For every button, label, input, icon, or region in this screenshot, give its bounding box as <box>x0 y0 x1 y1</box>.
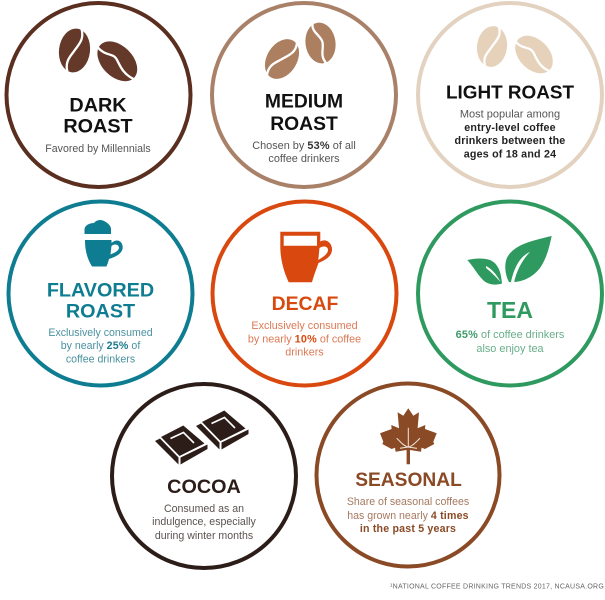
text: seasonal note: in the past 5 years <box>360 523 456 535</box>
text: cocoa note: Consumed as an <box>164 503 244 515</box>
heading: flavored roast: ROAST <box>66 300 135 322</box>
text: light roast note: ages of 18 and 24 <box>464 148 556 160</box>
icon: dark coffee beans <box>56 26 145 89</box>
text: light roast note: entry-level coffee <box>464 122 556 134</box>
text: light roast note: Most popular among <box>460 108 560 120</box>
panel: seasonal <box>316 384 500 566</box>
text: medium roast note: coffee drinkers <box>268 153 340 165</box>
text: decaf note: Exclusively consumed <box>251 320 358 332</box>
heading: cocoa: COCOA <box>167 476 241 498</box>
heading: seasonal: SEASONAL <box>355 470 462 491</box>
heading: dark roast: DARK <box>69 94 127 116</box>
panel: cocoa <box>112 384 296 568</box>
icon: latte cup <box>84 220 123 266</box>
text: seasonal note: Share of seasonal coffees <box>347 496 469 508</box>
panel: decaf <box>212 202 396 386</box>
text: flavored roast note: by nearly 25% of <box>61 340 140 352</box>
source footnote: ¹NATIONAL COFFEE DRINKING TRENDS 2017, NCAUSA.ORG <box>390 584 604 590</box>
panel: medium roast <box>212 3 396 187</box>
text: decaf note: by nearly 10% of coffee <box>248 334 361 346</box>
icon: tea leaves <box>467 236 552 285</box>
icon: decaf cup <box>280 232 332 282</box>
heading: light roast: LIGHT ROAST <box>446 83 574 104</box>
heading: dark roast: ROAST <box>63 116 133 138</box>
text: flavored roast note: coffee drinkers <box>66 354 135 366</box>
heading: medium roast: ROAST <box>270 114 338 135</box>
text: cocoa note: indulgence, especially <box>152 516 257 528</box>
icon: medium coffee beans <box>258 20 338 86</box>
text: seasonal note: has grown nearly 4 times <box>347 510 469 522</box>
panel: dark roast <box>6 3 190 187</box>
heading: decaf: DECAF <box>272 293 339 315</box>
icon: chocolate bar right <box>196 410 248 450</box>
text: tea note: also enjoy tea <box>476 343 545 355</box>
icon: chocolate bars <box>155 410 248 464</box>
text: dark roast note: Favored by Millennials <box>45 143 151 155</box>
icon: light coffee beans <box>475 24 560 81</box>
heading: tea: TEA <box>487 297 533 323</box>
text: flavored roast note: Exclusively consumed <box>48 327 153 339</box>
icon: chocolate bar left <box>155 426 208 464</box>
text: light roast note: drinkers between the <box>455 135 565 147</box>
text: cocoa note: during winter months <box>155 530 253 542</box>
panel: tea <box>418 202 602 386</box>
icon: maple leaf <box>380 408 437 464</box>
panel: light roast <box>418 3 602 187</box>
text: decaf note: drinkers <box>285 346 324 358</box>
text: medium roast note: Chosen by 53% of all <box>252 140 356 152</box>
heading: flavored roast: FLAVORED <box>47 279 154 301</box>
heading: medium roast: MEDIUM <box>265 91 343 112</box>
panel: flavored roast <box>8 202 192 386</box>
text: tea note: 65% of coffee drinkers <box>456 329 564 341</box>
